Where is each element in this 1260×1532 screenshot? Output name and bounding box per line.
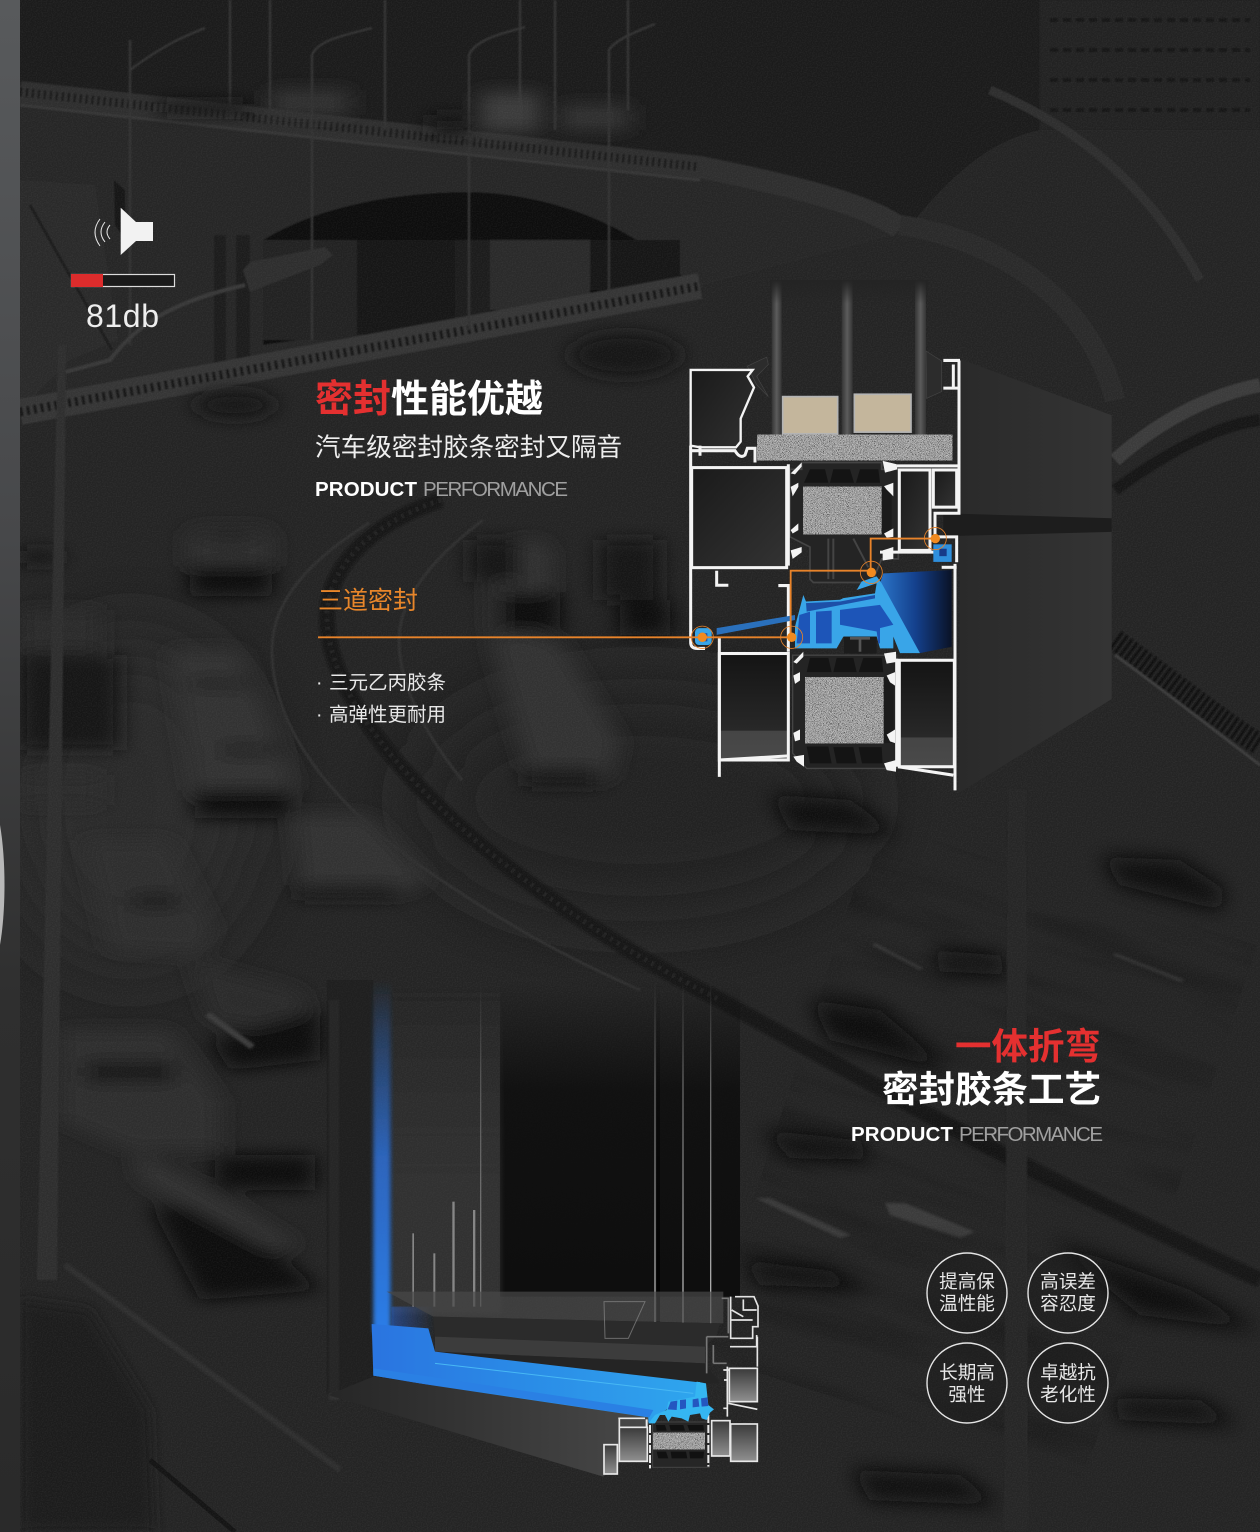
heading: 密封胶条工艺: 密封胶条工艺: [882, 1069, 1101, 1110]
badge: 高误差容忍度: 高误差: [1040, 1271, 1096, 1292]
orange seal callout lines: [318, 527, 946, 648]
bullet list: [316, 672, 446, 726]
blue end section: [648, 1382, 714, 1423]
seal point 4: [924, 527, 946, 550]
heading: 密封性能优越: 密封性能优越: [315, 379, 543, 421]
photo: large street lamp: [65, 247, 333, 372]
bullet 1: ·: [316, 672, 322, 694]
badge: 提高保温性能: 温性能: [939, 1293, 995, 1314]
blue horizontal gasket: [372, 1324, 700, 1423]
badge: 提高保温性能: [927, 1253, 1007, 1333]
photo: tone patches: [10, 640, 860, 960]
lower thermal break: [793, 655, 897, 768]
section diagram: window profile cross-section: [318, 280, 1112, 793]
bullet 2: 高弹性更耐用: [329, 704, 446, 726]
label: product performance 2: PRODUCT: [851, 1123, 953, 1146]
photo: left band: [0, 0, 20, 1532]
aluminium chambers: [691, 370, 957, 767]
glass dark area: [500, 980, 740, 1297]
photo: distant building: [1040, 0, 1260, 130]
badge: 卓越抗老化性: 老化性: [1040, 1384, 1096, 1405]
aluminium details: [691, 360, 960, 790]
upper thermal break: [790, 463, 898, 583]
blue small seal: [695, 544, 952, 645]
blue vertical gasket: [373, 980, 391, 1333]
blue left seal strip: [717, 615, 795, 635]
label: 三道密封: 三道密封: [318, 587, 418, 615]
badge: 长期高强性: [927, 1343, 1007, 1423]
noise level bar: [71, 274, 174, 287]
bullet 2: ·: [316, 704, 322, 726]
blue gasket section: [795, 576, 920, 654]
label: product performance: [315, 478, 568, 501]
sash fading column: [392, 980, 502, 1313]
photo: motion streaks, dark: [740, 795, 1260, 1505]
badge: 卓越抗老化性: 卓越抗: [1040, 1362, 1096, 1383]
photo: lamp posts: [130, 0, 655, 345]
subheading: 汽车级密封胶条密封又隔音: [315, 433, 622, 462]
upper translucent profile: [707, 1298, 728, 1373]
photo: road edge lines and tree: [20, 1265, 340, 1532]
top right white profile: [730, 1297, 758, 1367]
blue gasket extrusion: [880, 570, 952, 653]
badge: 长期高强性: 长期高: [939, 1362, 995, 1383]
glass vertical lines: [412, 980, 711, 1323]
photo: bridge structure: [20, 85, 1260, 765]
icon: sound waves: [95, 219, 110, 246]
lower right chambers: [712, 1421, 757, 1461]
seal point 3: [860, 561, 882, 584]
badge: 提高保温性能: 提高保: [939, 1271, 995, 1292]
thermal break white hooks: [647, 1415, 708, 1468]
grey rails along bottom: [387, 1292, 723, 1383]
left white chambers: [604, 1418, 647, 1474]
icon: speaker: [95, 208, 153, 255]
glass panes: [770, 280, 928, 435]
photo: sky and trees above bridge: [20, 0, 1260, 232]
label: product performance 2: [851, 1123, 1103, 1146]
side face of frame: [943, 359, 1112, 793]
lower thermal break: [653, 1422, 709, 1467]
badge: 高误差容忍度: [1028, 1253, 1108, 1333]
seal point 2: [781, 626, 803, 648]
spacers: [783, 394, 911, 434]
photo: smear texture: [703, 822, 1257, 1478]
label: product performance: PERFORMANCE: [423, 478, 568, 501]
foam strips: [757, 435, 952, 460]
frame end section: [604, 1297, 758, 1474]
photo: main road rail curve: [272, 500, 1260, 1280]
aluminium hooks: [791, 461, 897, 772]
label: product performance: PRODUCT: [315, 478, 417, 501]
badge: 长期高强性: 强性: [948, 1384, 986, 1405]
blue gasket corner glow: [392, 1307, 435, 1350]
noise value: 81db: [86, 298, 159, 334]
photo: lamp poles: [37, 345, 1028, 1530]
badge: 卓越抗老化性: [1028, 1343, 1108, 1423]
bullet 1: 三元乙丙胶条: [329, 672, 446, 694]
badge: 高误差容忍度: 容忍度: [1040, 1293, 1096, 1314]
seal point 1: [691, 626, 713, 648]
frame left side: [327, 980, 373, 1393]
middle white profile: [723, 1367, 757, 1417]
photo: blurred cars: [20, 527, 670, 1300]
label: product performance 2: PERFORMANCE: [959, 1123, 1103, 1146]
photo: motion streaks, light: [205, 943, 1185, 1238]
corner window render: [327, 980, 758, 1477]
gaskets: [747, 351, 942, 398]
photo: cars on bridge: [160, 90, 680, 419]
heading: 一体折弯: 一体折弯: [955, 1026, 1101, 1067]
lower frame face: [328, 1377, 648, 1477]
